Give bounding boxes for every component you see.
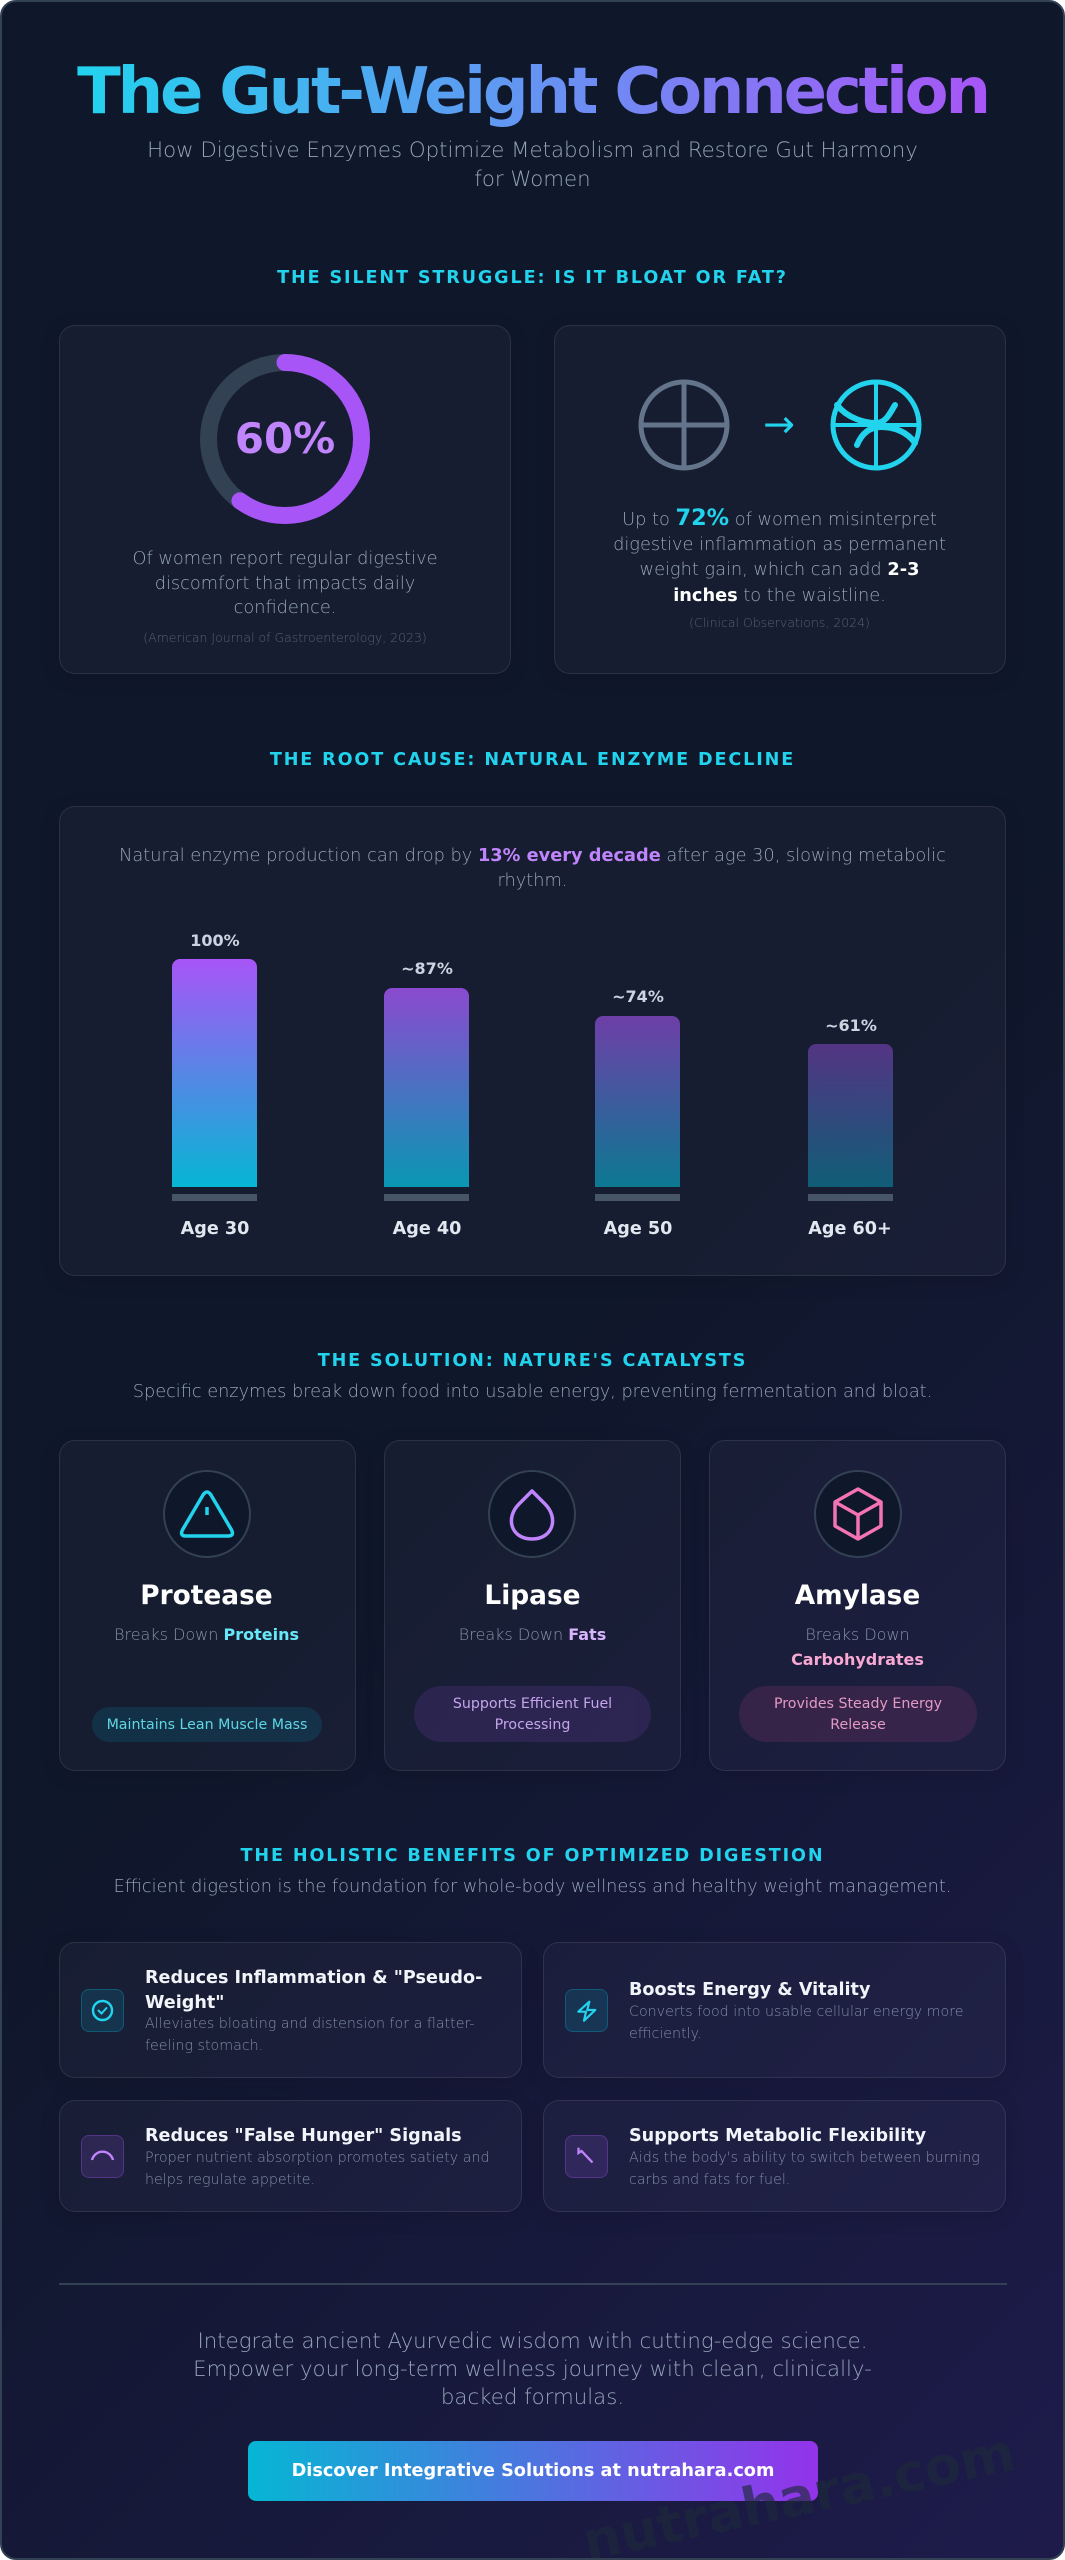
bar: age 30	[172, 930, 257, 1239]
benefit pill: Supports Efficient Fuel	[453, 1696, 612, 1712]
description with 72% stat: Up to 72% of women misinterpret	[622, 505, 937, 531]
benefit title	[145, 1968, 482, 2013]
benefit pill: Provides Steady Energy	[774, 1696, 942, 1712]
panel: protease	[59, 1440, 356, 1771]
heading: the root cause: THE ROOT CAUSE: NATURAL ENZYME DECLINE	[270, 750, 795, 770]
panel: metabolic flexibility	[543, 2100, 1006, 2212]
age label: Age 30	[181, 1219, 249, 1239]
icon: cube	[814, 1470, 902, 1558]
benefits subheading: Efficient digestion is the foundation for whole-body wellness and healthy weight management.	[114, 1877, 951, 1897]
heading: the silent struggle: THE SILENT STRUGGLE: IS IT BLOAT OR FAT?	[277, 268, 788, 288]
enzyme function: Breaks Down Proteins	[114, 1625, 299, 1644]
enzyme function: Breaks Down Fats	[459, 1625, 606, 1644]
bar fill	[384, 988, 469, 1187]
bar fill	[808, 1044, 893, 1187]
panel: boosts energy	[543, 1942, 1006, 2078]
age label: Age 60+	[808, 1219, 892, 1239]
stat value: 60%	[235, 414, 335, 463]
base marker	[808, 1194, 893, 1201]
chart intro text	[119, 846, 946, 891]
chart intro text: Natural enzyme production can drop by 13% every decade after age 30, slowing metabolic	[119, 846, 946, 866]
bar: age 60+	[808, 1016, 893, 1239]
call to action button: Discover Integrative Solutions at nutrahara.com	[292, 2461, 774, 2481]
enzyme function	[791, 1625, 924, 1669]
bar: age 50	[595, 987, 680, 1239]
benefit title: Weight"	[145, 1993, 224, 2013]
panel: 60% statistic	[59, 325, 511, 674]
benefit pill	[739, 1686, 977, 1742]
description with 72% stat: digestive inflammation as permanent	[613, 535, 946, 555]
icon: drop	[488, 1470, 576, 1558]
panel: amylase	[709, 1440, 1006, 1771]
solution subheading: Specific enzymes break down food into usable energy, preventing fermentation and bloat.	[133, 1382, 932, 1402]
icon: flat circle	[638, 380, 730, 470]
footer text: backed formulas.	[441, 2385, 624, 2410]
enzyme name: Protease	[140, 1580, 273, 1611]
benefit pill	[414, 1686, 651, 1742]
benefit description: feeling stomach.	[145, 2038, 263, 2054]
bar fill	[595, 1016, 680, 1187]
bar fill	[172, 959, 257, 1187]
chart intro text: rhythm.	[498, 871, 567, 891]
benefit description	[629, 2150, 980, 2188]
enzyme name: Lipase	[484, 1580, 581, 1611]
benefit description: Alleviates bloating and distension for a flatter-	[145, 2016, 475, 2032]
footer text	[193, 2329, 872, 2410]
subtitle: for Women	[474, 167, 591, 192]
enzyme function: Breaks Down	[805, 1625, 910, 1644]
benefit pill	[92, 1707, 322, 1742]
icon: arc	[81, 2135, 124, 2178]
panel: false hunger	[59, 2100, 522, 2212]
value label: 100%	[190, 930, 240, 950]
arrow: →	[763, 402, 795, 446]
description with 72% stat: weight gain, which can add 2-3	[640, 560, 919, 580]
benefit description: helps regulate appetite.	[145, 2172, 315, 2188]
stat description: discomfort that impacts daily	[155, 574, 415, 594]
benefit title: Boosts Energy & Vitality	[629, 1980, 870, 2000]
enzyme function: Carbohydrates	[791, 1650, 924, 1669]
panel: reduces inflammation	[59, 1942, 522, 2078]
subtitle: How Digestive Enzymes Optimize Metabolism and Restore Gut Harmony	[147, 138, 918, 163]
stat description	[132, 549, 438, 618]
description with 72% stat	[613, 505, 946, 606]
citation: (Clinical Observations, 2024)	[689, 615, 870, 630]
bar: age 40	[384, 959, 469, 1239]
benefit description: carbs and fats for fuel.	[629, 2172, 790, 2188]
age label: Age 50	[604, 1219, 672, 1239]
footer text: Empower your long-term wellness journey with clean, clinically-	[193, 2357, 872, 2382]
citation: (American Journal of Gastroenterology, 2023)	[143, 630, 427, 645]
benefit description: Aids the body's ability to switch between burning	[629, 2150, 980, 2166]
value label: ~74%	[612, 987, 664, 1006]
benefit description: Converts food into usable cellular energy more	[629, 2004, 964, 2020]
description with 72% stat: inches to the waistline.	[673, 586, 886, 606]
title: The Gut-Weight Connection	[77, 55, 988, 129]
benefit description	[629, 2004, 964, 2042]
panel: lipase	[384, 1440, 681, 1771]
benefit pill: Processing	[495, 1717, 570, 1733]
subtitle	[147, 138, 918, 192]
icon: bolt	[565, 1989, 608, 2032]
benefit title: Supports Metabolic Flexibility	[629, 2126, 926, 2146]
stat description: confidence.	[234, 598, 336, 618]
age label: Age 40	[393, 1219, 461, 1239]
benefit title: Reduces "False Hunger" Signals	[145, 2126, 462, 2146]
enzyme name: Amylase	[795, 1580, 920, 1611]
base marker	[172, 1194, 257, 1201]
base marker	[384, 1194, 469, 1201]
call to action button	[248, 2441, 818, 2501]
bar chart	[172, 930, 893, 1239]
benefit description	[145, 2016, 475, 2054]
value label: ~61%	[825, 1016, 877, 1034]
icon: bloated circle	[830, 380, 922, 470]
heading: the solution: THE SOLUTION: NATURE'S CATALYSTS	[318, 1351, 747, 1371]
benefit pill: Release	[830, 1717, 886, 1733]
base marker	[595, 1194, 680, 1201]
divider	[59, 2283, 1007, 2285]
heading: holistic benefits: THE HOLISTIC BENEFITS OF OPTIMIZED DIGESTION	[241, 1846, 824, 1866]
value label: ~87%	[401, 959, 453, 978]
benefit description: efficiently.	[629, 2026, 702, 2042]
panel: bloat misinterpretation	[554, 325, 1006, 674]
stat description: Of women report regular digestive	[132, 549, 438, 569]
donut chart 60%	[200, 354, 370, 524]
icon: check circle	[81, 1989, 124, 2032]
benefit description	[145, 2150, 490, 2188]
benefit description: Proper nutrient absorption promotes satiety and	[145, 2150, 490, 2166]
icon: triangle	[163, 1470, 251, 1558]
footer text: Integrate ancient Ayurvedic wisdom with cutting-edge science.	[198, 2329, 867, 2354]
icon: switch line	[565, 2135, 608, 2178]
benefit title: Reduces Inflammation & "Pseudo-	[145, 1968, 482, 1988]
panel: enzyme decline chart	[59, 806, 1006, 1276]
benefit pill: Maintains Lean Muscle Mass	[107, 1716, 307, 1732]
